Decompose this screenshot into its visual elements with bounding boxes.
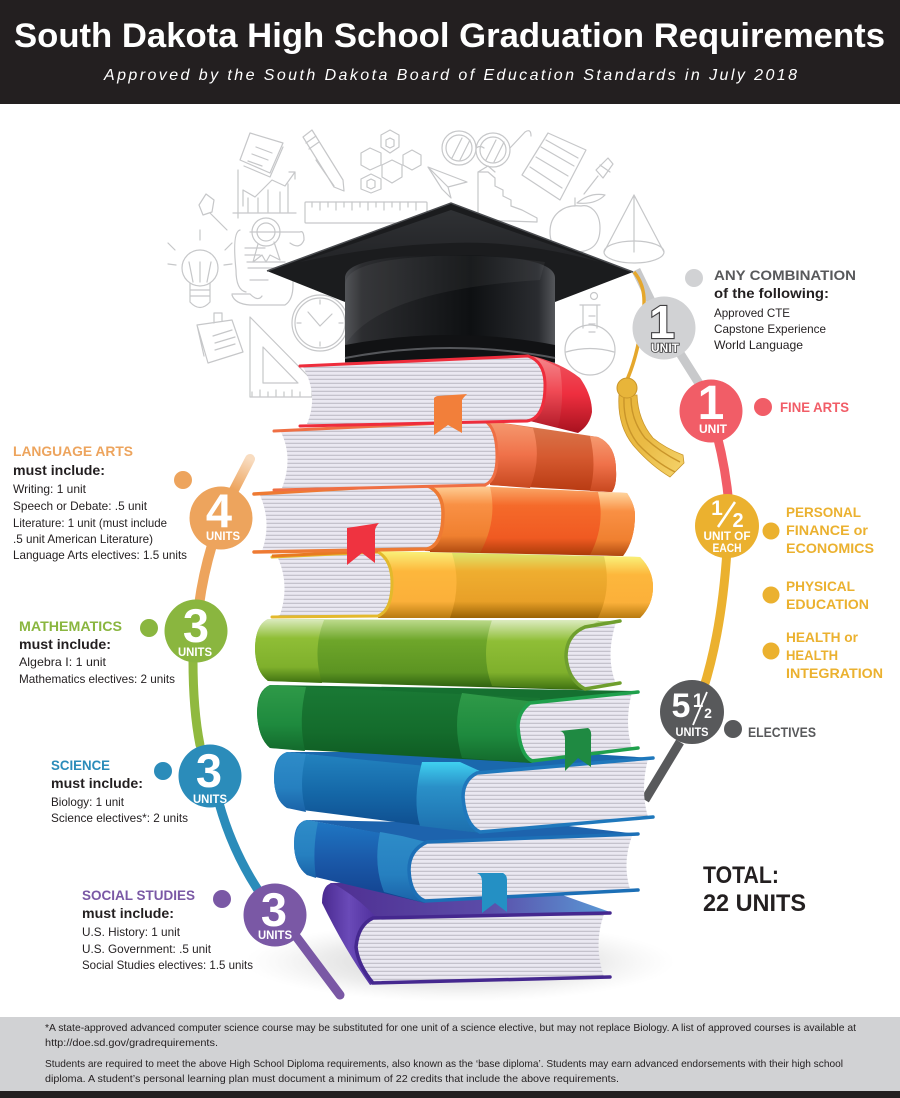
- label: physical education: PHYSICAL: [786, 578, 855, 594]
- unit circle: social studies: [244, 883, 306, 946]
- text: science: SCIENCE: [51, 757, 110, 773]
- label: personal finance or economics: PERSONAL: [786, 504, 861, 520]
- label: health or health integration: [786, 629, 883, 681]
- ground shadow under books: [245, 922, 675, 1002]
- text: social studies: [82, 887, 253, 972]
- unit circle: mathematics: 3: [183, 599, 209, 652]
- unit circle: electives: 2: [704, 705, 712, 721]
- unit circle: any combination, 1 unit: 1: [649, 296, 675, 348]
- label: personal finance or economics: ECONOMICS: [786, 540, 874, 556]
- bookmark: orange: [434, 394, 467, 435]
- unit circle: half unit of each: [695, 494, 759, 558]
- unit circle: half unit of each: 2: [732, 510, 744, 532]
- connector path: left side: [193, 459, 340, 995]
- unit circle: electives: UNITS: [676, 727, 709, 739]
- book 6: dark green: [257, 685, 638, 763]
- book 7: blue: [274, 752, 653, 833]
- total units: 22 UNITS: [703, 890, 806, 917]
- text: language arts: [13, 443, 187, 562]
- dot: mathematics: [140, 619, 158, 637]
- total units: TOTAL:: [703, 862, 779, 889]
- text: science: Biology: 1 unit: [51, 795, 125, 809]
- footer notes panel: Students are required to meet the above High School Diploma requirements, also known as the ‘base diploma’. Students may earn advanced endorsements with their high school: [45, 1058, 843, 1070]
- label: physical education: EDUCATION: [786, 596, 869, 612]
- dot: health: [762, 642, 780, 660]
- unit circle: half unit of each: 1: [711, 497, 723, 520]
- text: language arts: .5 unit American Literature): [13, 532, 153, 546]
- book 1: red: [300, 355, 592, 433]
- connector path: right side: [636, 270, 729, 800]
- dot: science: [154, 762, 172, 780]
- text: language arts: Writing: 1 unit: [13, 482, 87, 496]
- total units: [703, 862, 806, 917]
- text: social studies: U.S. History: 1 unit: [82, 925, 181, 939]
- text: any combination: of the following:: [714, 285, 829, 301]
- unit circle: social studies: UNITS: [258, 930, 292, 942]
- bookmark: red: [347, 523, 379, 565]
- unit circle: fine arts: UNIT: [699, 424, 727, 436]
- unit circle: any combination, 1 unit: [632, 296, 696, 360]
- unit circle: language arts: UNITS: [206, 531, 240, 543]
- text: social studies: Social Studies electives: 1.5 units: [82, 958, 253, 972]
- unit circle: language arts: [190, 484, 252, 550]
- unit circle: fine arts: [680, 377, 742, 442]
- footer notes panel: http://doe.sd.gov/gradrequirements.: [45, 1037, 218, 1049]
- label: personal finance or economics: [786, 504, 874, 556]
- book 9: purple: [322, 880, 610, 985]
- unit circle: science: 3: [196, 744, 222, 797]
- text: language arts: must include:: [13, 462, 105, 478]
- unit circle: science: [178, 744, 242, 808]
- text: any combination: World Language: [714, 338, 803, 352]
- subtitle: Approved by the South Dakota Board of Education Standards in July 2018: [103, 67, 797, 84]
- text: science: Science electives*: 2 units: [51, 811, 188, 825]
- book 5: light green: [255, 619, 620, 690]
- label: physical education: [786, 578, 869, 612]
- label: health or health integration: INTEGRATION: [786, 665, 883, 681]
- dot: electives: [724, 720, 742, 738]
- unit circle: half unit of each: UNIT OF: [704, 531, 750, 543]
- text: any combination: Capstone Experience: [714, 322, 826, 336]
- label: health or health integration: HEALTH: [786, 647, 838, 663]
- text: mathematics: [19, 618, 175, 686]
- bookmark: blue: [477, 873, 507, 913]
- text: mathematics: must include:: [19, 636, 111, 652]
- bookmark: green: [560, 728, 591, 771]
- unit circle: social studies: 3: [261, 883, 287, 936]
- dot: social studies: [213, 890, 231, 908]
- unit circle: electives: [660, 680, 724, 744]
- unit circle: any combination, 1 unit: UNIT: [651, 343, 679, 355]
- graduation cap: [267, 203, 633, 364]
- text: science: must include:: [51, 775, 143, 791]
- unit circle: electives: 5: [672, 687, 690, 725]
- text: science: [51, 757, 188, 825]
- text: social studies: must include:: [82, 905, 174, 921]
- bottom bar: [0, 1091, 900, 1098]
- text: language arts: Speech or Debate: .5 unit: [13, 499, 148, 513]
- text: language arts: Literature: 1 unit (must include: [13, 516, 167, 530]
- footer notes panel: *A state-approved advanced computer science course may be substituted for one unit of a science elective, but may not replace Biology. A list of approved courses is available at: [45, 1022, 856, 1034]
- label: health or health integration: HEALTH or: [786, 629, 859, 645]
- unit circle: language arts: 4: [206, 484, 232, 537]
- title: South Dakota High School Graduation Requirements: [14, 17, 885, 55]
- dot: fine arts: [754, 398, 772, 416]
- dot: language arts: [174, 471, 192, 489]
- unit circle: mathematics: [164, 599, 228, 662]
- tassel: [617, 272, 684, 477]
- dot: any combination: [685, 269, 703, 287]
- dot: personal finance: [762, 522, 780, 540]
- text: mathematics: Mathematics electives: 2 units: [19, 672, 175, 686]
- text: any combination: Approved CTE: [714, 306, 790, 320]
- unit circle: mathematics: UNITS: [178, 647, 212, 659]
- text: mathematics: Algebra I: 1 unit: [19, 655, 107, 669]
- footer notes panel: [0, 1017, 900, 1091]
- label: electives: ELECTIVES: [748, 724, 816, 740]
- footer notes panel: diploma. A student’s personal learning plan must document a minimum of 22 credits that include the above requirements.: [45, 1073, 619, 1085]
- unit circle: half unit of each: EACH: [712, 543, 742, 555]
- book 4: yellow: [272, 551, 653, 618]
- doodle icons background: [168, 130, 664, 397]
- dot: physical education: [762, 586, 780, 604]
- label: personal finance or economics: FINANCE or: [786, 522, 869, 538]
- unit circle: science: UNITS: [193, 794, 227, 806]
- unit circle: electives: 1: [693, 691, 704, 712]
- label: fine arts: FINE ARTS: [780, 399, 849, 415]
- header banner: [0, 0, 900, 104]
- text: any combination: [714, 267, 856, 352]
- text: language arts: Language Arts electives: 1.5 units: [13, 548, 187, 562]
- text: social studies: U.S. Government: .5 unit: [82, 942, 212, 956]
- unit circle: fine arts: 1: [698, 377, 724, 430]
- text: any combination: ANY COMBINATION: [714, 267, 856, 283]
- text: social studies: SOCIAL STUDIES: [82, 887, 195, 903]
- book 3: orange: [254, 484, 635, 556]
- text: mathematics: MATHEMATICS: [19, 618, 122, 634]
- book 2: red-orange: [274, 421, 616, 492]
- text: language arts: LANGUAGE ARTS: [13, 443, 133, 459]
- book 8: blue: [294, 820, 638, 903]
